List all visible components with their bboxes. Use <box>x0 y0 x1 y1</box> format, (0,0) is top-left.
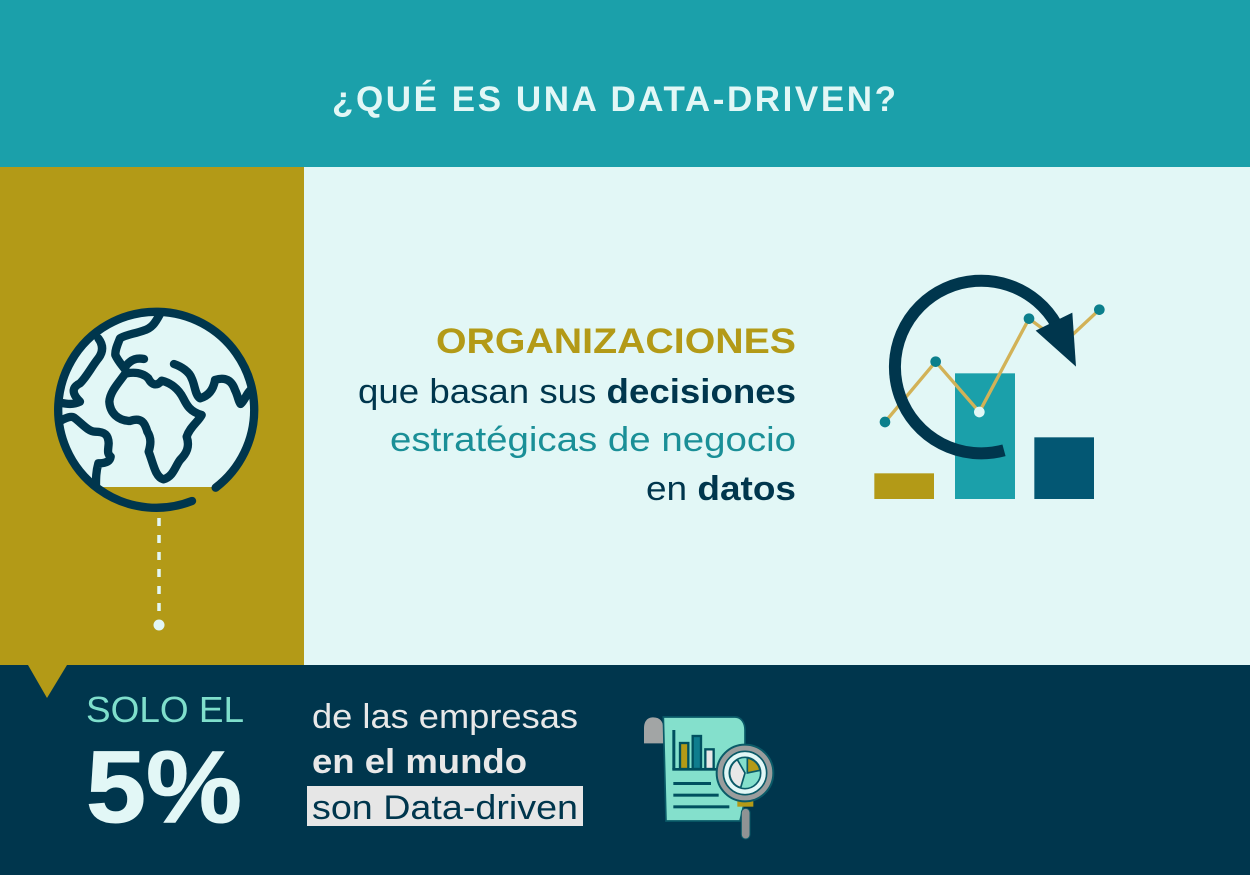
scroll tab <box>644 717 663 743</box>
icon: report with magnifier <box>644 717 773 839</box>
chart: bars, trend line and cycle arrow <box>874 281 1105 499</box>
text block: definition <box>358 322 796 508</box>
text line: datos: en datos <box>646 470 796 508</box>
text line: de las empresas: de las empresas <box>312 698 578 736</box>
text line: decisiones: que basan sus decisiones <box>358 373 796 411</box>
trend line <box>880 304 1105 427</box>
mini bar chart <box>672 730 718 771</box>
dotted connector <box>154 518 164 630</box>
stat: solo el 5% <box>86 689 244 844</box>
bars <box>874 373 1094 499</box>
icon: globe <box>58 312 254 508</box>
magnifier <box>717 745 773 839</box>
cycle arrow <box>895 281 1076 453</box>
panel: definition background <box>304 167 1250 665</box>
text lines <box>673 782 729 808</box>
panel: ochre sidebar <box>0 167 304 665</box>
panel: bottom statistic band <box>0 665 1250 875</box>
document <box>663 717 745 821</box>
icon: callout pointer <box>28 665 67 698</box>
number: 5%: 5% <box>86 730 242 844</box>
text line: estrategicas: estratégicas de negocio <box>390 421 796 459</box>
text block: de las empresas en el mundo <box>307 698 583 827</box>
text line: en el mundo: en el mundo <box>312 743 527 781</box>
highlight: son data-driven: son Data-driven <box>312 789 578 827</box>
title: ¿QUÉ ES UNA DATA-DRIVEN? <box>332 79 896 119</box>
label: solo el: SOLO EL <box>86 689 244 730</box>
heading: organizaciones: ORGANIZACIONES <box>436 322 796 361</box>
panel: header band <box>0 0 1250 167</box>
